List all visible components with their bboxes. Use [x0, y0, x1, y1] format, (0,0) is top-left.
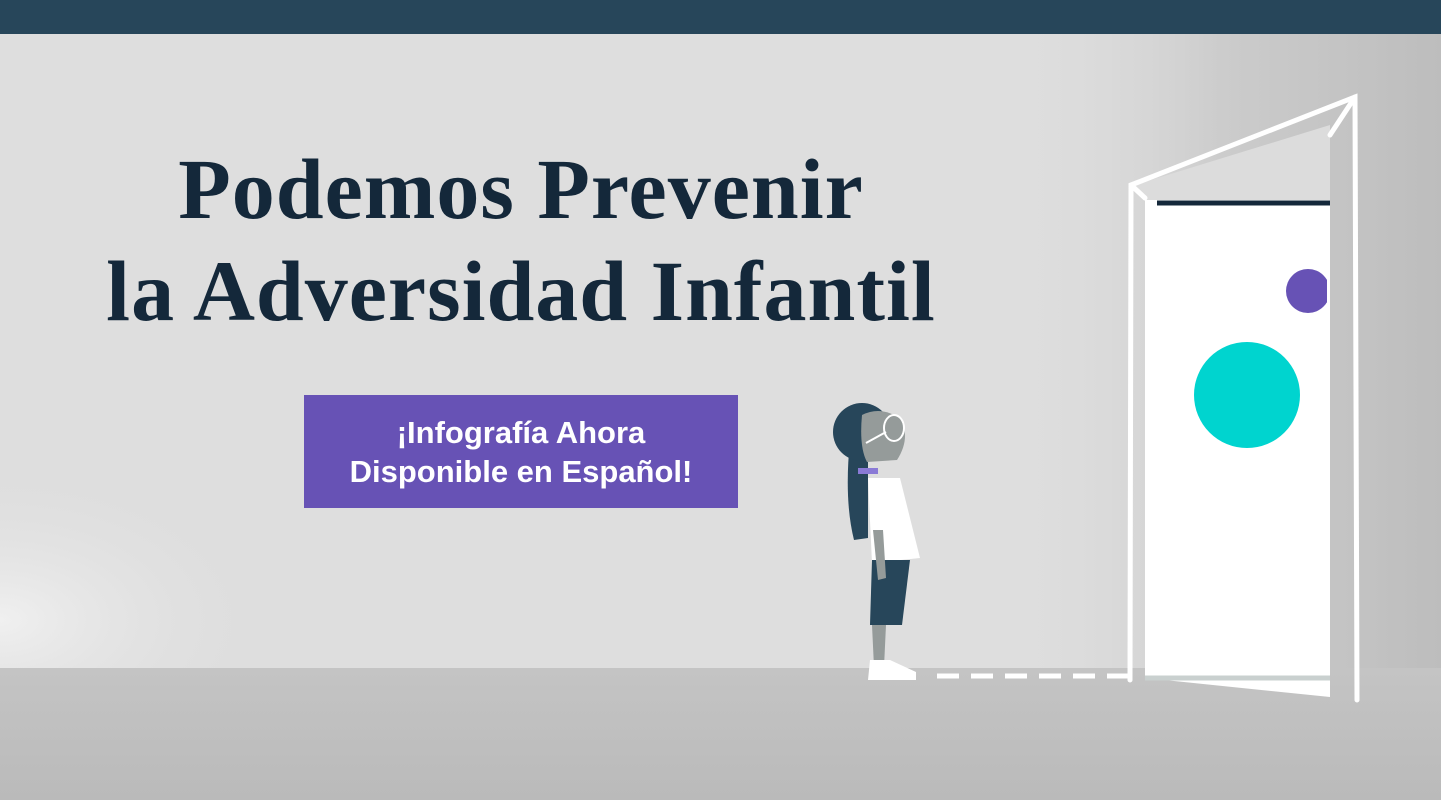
door panel — [1135, 125, 1330, 697]
title: la Adversidad Infantil — [106, 243, 936, 339]
button: Spanish infographic available: Disponible en Español! — [350, 454, 692, 488]
title: Podemos Prevenir — [178, 141, 864, 237]
title — [106, 141, 936, 339]
door frame — [1130, 97, 1357, 700]
button: Spanish infographic available: ¡Infografía Ahora — [397, 414, 645, 450]
button: Spanish infographic available — [304, 395, 738, 508]
illustration: open door — [1128, 94, 1360, 702]
illustration: girl looking up — [833, 403, 920, 680]
top bar — [0, 0, 1441, 34]
dashed floor line — [937, 674, 1128, 678]
